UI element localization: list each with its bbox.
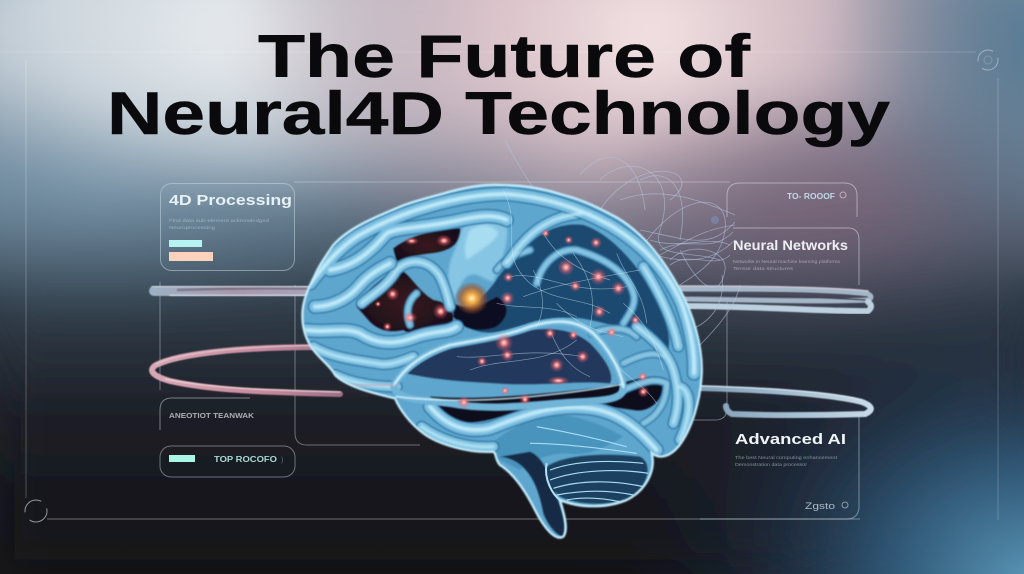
ring: upper right	[680, 286, 871, 311]
caption: Neural Networks: Networks in Neural machine learning platforms	[733, 259, 841, 264]
ring: middle left	[152, 346, 340, 394]
caption: Advanced AI	[735, 455, 838, 467]
panel: top right label: TO- ROOOF	[787, 192, 835, 201]
panel: top rocofo pill	[160, 446, 295, 477]
gyri tubes	[307, 194, 694, 450]
brain illustration	[302, 185, 702, 538]
caption: 4D Processing: Find data sub-element acknowledged	[169, 218, 270, 223]
title: The Future of	[258, 23, 751, 90]
panel: Advanced AI	[700, 413, 859, 519]
tube highlights	[307, 194, 694, 450]
temporal lobe outline	[303, 322, 623, 407]
heading: 4D Processing: 4D Processing	[169, 192, 292, 209]
central frame panel	[294, 182, 730, 445]
rings behind the brain	[152, 286, 871, 415]
status label: Zgsto	[805, 501, 835, 511]
bar: cyan	[169, 240, 202, 247]
heading: Neural Networks: Neural Networks	[733, 238, 848, 253]
caption: Advanced AI: Demonstration data processor	[735, 462, 808, 467]
bar: mint	[169, 455, 195, 462]
panel: 4D Processing	[160, 184, 294, 270]
glowing core	[454, 282, 489, 315]
brain base	[302, 185, 702, 538]
title: Neural4D Technology	[107, 80, 891, 147]
fine neural fibres	[457, 190, 663, 403]
bar: peach	[169, 252, 213, 261]
caption: 4D Processing: Neuroprocessing	[169, 225, 216, 230]
title	[107, 23, 891, 147]
caption: Neural Networks: Tensor data structures	[733, 266, 794, 271]
heading: Advanced AI: Advanced AI	[735, 431, 846, 448]
panel: top right label	[727, 183, 857, 217]
dark sulci	[357, 224, 669, 537]
caption: Advanced AI: The best Neural computing enhancement	[735, 455, 838, 460]
rim highlights	[302, 185, 702, 538]
caption: 4D Processing	[169, 218, 270, 230]
synapse sparks	[375, 229, 649, 409]
caption: Neural Networks	[733, 259, 841, 271]
ring: lower right	[700, 386, 871, 415]
panel: top rocofo pill: )	[281, 457, 283, 464]
cerebellum folds	[530, 427, 648, 502]
label: lower left: ANEOTIOT TEANWAK	[169, 411, 255, 420]
panel: Neural Networks	[733, 228, 859, 285]
ring: upper left	[152, 286, 320, 296]
central light gyrus	[448, 218, 507, 302]
panel: lower left frame	[160, 282, 250, 430]
neural filaments	[505, 140, 740, 350]
panel: top rocofo pill: TOP ROCOFO	[214, 455, 277, 464]
